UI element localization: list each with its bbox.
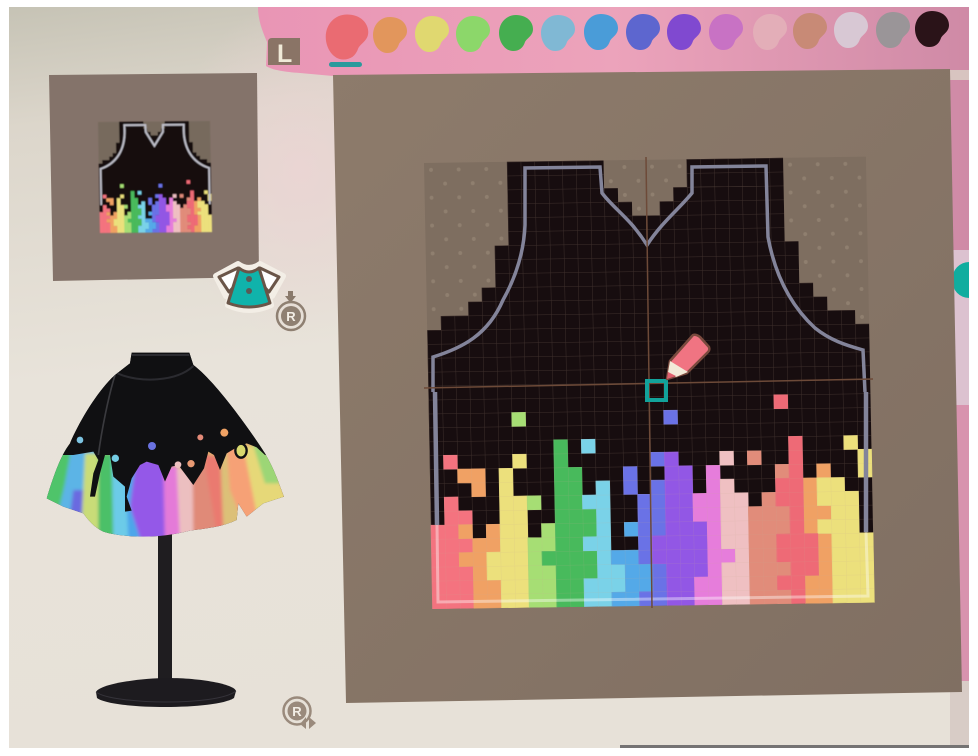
palette colours: [326, 11, 949, 60]
icon: dress garment type: [216, 264, 283, 310]
mannequin stand: [96, 530, 236, 707]
icon: drawing cursor: [647, 381, 666, 400]
centre crosshair: [424, 157, 873, 608]
paint droplets: [77, 429, 247, 468]
black top with drips: [62, 352, 266, 512]
pixel grid canvas: [424, 157, 874, 609]
grid lines: [424, 157, 874, 609]
icon: R button rotate: R: [292, 704, 302, 719]
pixel art: dress pattern: [424, 157, 874, 609]
selected colour marker: [329, 62, 362, 67]
rainbow hem: [40, 440, 287, 543]
top palette bar: [258, 7, 969, 745]
teal tab at right edge: [952, 262, 969, 298]
icon: R button down: [277, 291, 305, 330]
dress seam outline: [433, 166, 868, 602]
icon: R button rotate: [284, 698, 316, 729]
thumbnail panel: [49, 73, 259, 281]
main canvas panel: [333, 69, 962, 703]
skirt on mannequin: [40, 350, 287, 543]
L button: L: [277, 40, 292, 68]
icon: R button down: R: [286, 309, 296, 324]
L button: [268, 38, 300, 68]
fold highlights: [98, 375, 115, 455]
thumbnail pixel art: [98, 121, 212, 233]
icon: pencil: [667, 335, 709, 379]
